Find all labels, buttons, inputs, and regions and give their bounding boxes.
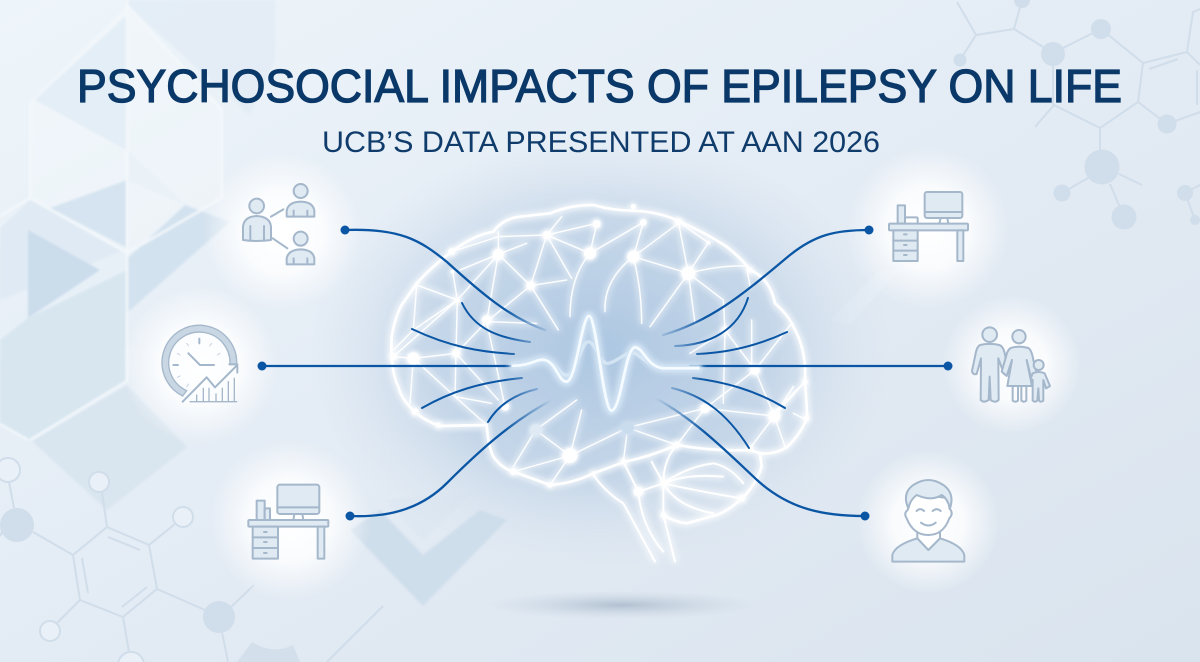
title: PSYCHOSOCIAL IMPACTS OF EPILEPSY ON LIFE: [77, 60, 1122, 112]
connector end dots: [258, 226, 952, 520]
connector: personal wellbeing: [657, 399, 865, 516]
brain stem and cerebellum: [593, 445, 743, 562]
icon: smiling person: [892, 480, 964, 562]
icon: clock with rising chart: [162, 325, 237, 402]
connector: desk, top right: [663, 230, 869, 335]
molecule: top right: [954, 0, 1200, 230]
icon: office desk, left: [248, 485, 328, 559]
icon: social connections: [243, 184, 314, 264]
connector: work: [350, 400, 552, 516]
connector lines: [262, 230, 948, 516]
brain illustration: [390, 204, 809, 562]
floor shadow: [487, 591, 757, 619]
brain network lines: [391, 205, 807, 562]
connector: family: [690, 365, 948, 367]
icon: office desk, right: [889, 192, 968, 261]
brain backdrop glow: [310, 135, 890, 565]
connector: relationships: [345, 230, 545, 330]
cortex outline: [391, 205, 807, 523]
neural links: [393, 217, 807, 485]
icon halos: [120, 146, 1082, 602]
inner branch lines: [412, 298, 787, 448]
connector: time and productivity: [262, 365, 520, 367]
brain nodes: [390, 204, 809, 518]
pulse waveform: [513, 316, 698, 411]
background hexagon pattern: [0, 0, 900, 606]
molecule: bottom left: [0, 458, 383, 662]
icon: family: [972, 327, 1050, 402]
subtitle: UCB’S DATA PRESENTED AT AAN 2026: [322, 126, 880, 159]
